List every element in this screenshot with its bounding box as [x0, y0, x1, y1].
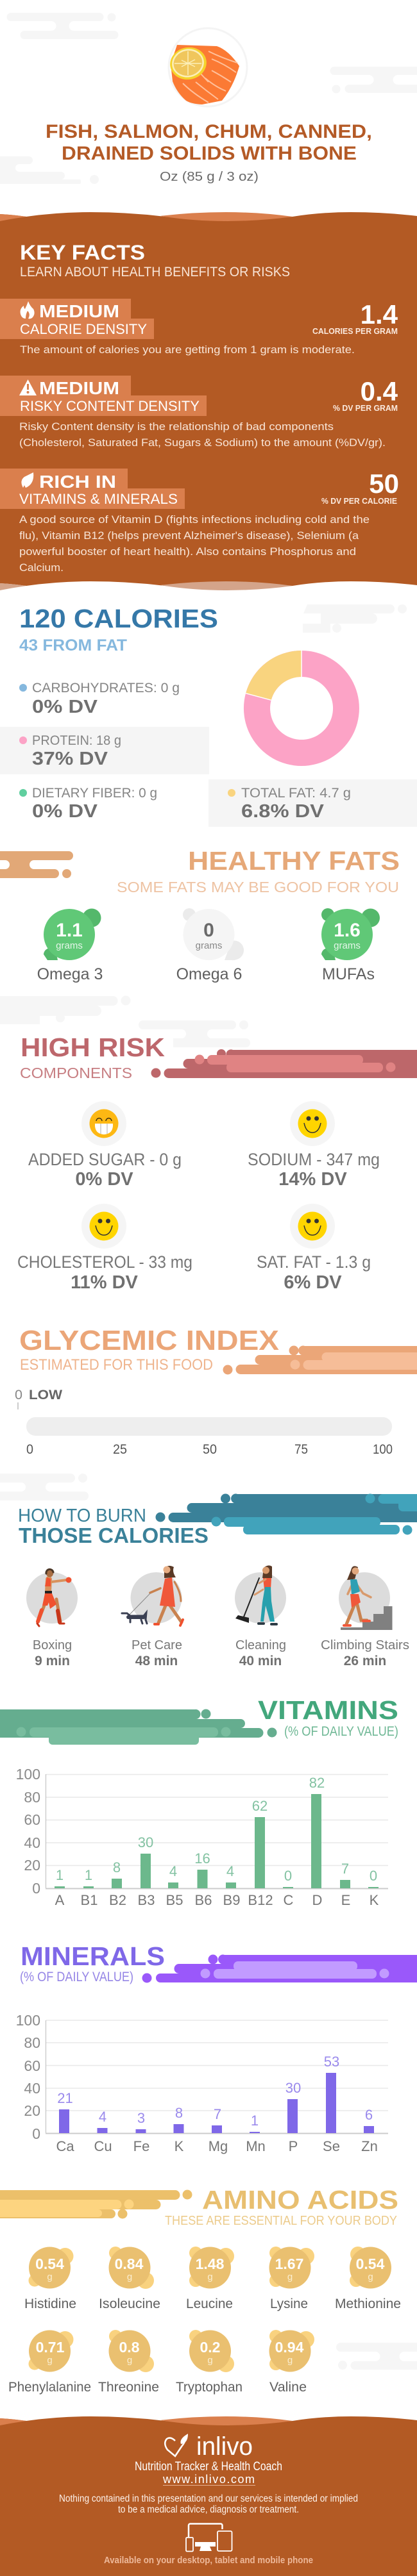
decorative cloud	[0, 2190, 192, 2219]
decorative cloud	[151, 1049, 417, 1078]
icon: smiling face	[298, 1211, 327, 1241]
bar chart: vitamins: B1	[81, 1892, 98, 1908]
legend: protein	[0, 727, 209, 774]
fact: rich in vitamins and minerals: VITAMINS & MINERALS	[19, 491, 178, 507]
bar chart: vitamins: 8	[113, 1859, 121, 1875]
wave bottom	[0, 581, 417, 596]
bar chart: minerals: Ca	[56, 2138, 74, 2154]
bar chart: minerals: 8	[175, 2105, 183, 2121]
activity: pet care	[122, 1566, 183, 1668]
badge: histidine: g	[47, 2272, 53, 2282]
bar chart: vitamins: 4	[169, 1863, 177, 1879]
badge: MUFAs	[321, 908, 380, 983]
bar chart: minerals: 80	[24, 2034, 40, 2051]
fact: calorie density: MEDIUM	[39, 301, 119, 321]
badge: tryptophan: g	[207, 2355, 213, 2366]
bar chart: minerals: Zn	[361, 2138, 378, 2154]
badge: threonine: Threonine	[98, 2380, 159, 2395]
activity: boxing: Boxing	[33, 1638, 72, 1652]
badge: omega 3: Omega 3	[37, 965, 103, 983]
bar chart: vitamins: 40	[24, 1834, 40, 1851]
panel: amino acids	[0, 2185, 401, 2395]
gauge axis: 0	[26, 1442, 33, 1457]
badge: tryptophan: Tryptophan	[176, 2380, 243, 2395]
icon: smiling face	[298, 1109, 327, 1138]
disclaimer: to be a medical advice, diagnosis or treatment.	[118, 2504, 299, 2515]
badge: phenylalanine	[8, 2331, 91, 2395]
bar chart: vitamins: A	[55, 1892, 65, 1908]
bar chart: vitamins: 62	[252, 1798, 268, 1814]
heading: LEARN ABOUT HEALTH BENEFITS OR RISKS	[20, 265, 290, 279]
bar chart: vitamins: B3	[138, 1892, 155, 1908]
activity: cleaning: Cleaning	[235, 1638, 286, 1652]
activity: climbing stairs: Climbing Stairs	[321, 1638, 409, 1652]
badge: histidine: Histidine	[24, 2297, 76, 2311]
panel: key facts	[0, 212, 417, 596]
panel: footer	[0, 2416, 417, 2576]
subheading: (% OF DAILY VALUE)	[284, 1724, 398, 1739]
bar chart: vitamins: 30	[138, 1834, 153, 1850]
bar chart: vitamins: B12	[248, 1892, 273, 1908]
bar chart: minerals: 0	[32, 2125, 40, 2142]
bar chart: minerals: 30	[285, 2080, 301, 2096]
legend: carbohydrates: 0% DV	[32, 697, 98, 717]
bar chart: minerals: 3	[137, 2110, 145, 2126]
badge: isoleucine: 0.84	[115, 2256, 144, 2272]
disclaimer: Nothing contained in this presentation and our services is intended or implied	[59, 2493, 358, 2504]
bar chart: vitamins: 20	[24, 1857, 40, 1874]
fact: calorie density: 1.4	[361, 299, 398, 329]
gauge bar	[26, 1417, 392, 1436]
serving size: Oz (85 g / 3 oz)	[160, 170, 259, 184]
bar chart: vitamins: 80	[24, 1789, 40, 1806]
heading: VITAMINS	[258, 1695, 398, 1725]
legend: total fat: 6.8% DV	[241, 801, 325, 822]
bar chart: minerals: 53	[324, 2054, 339, 2070]
fact: rich in vitamins and minerals: 50	[369, 469, 399, 499]
fact: calorie density	[0, 299, 398, 356]
fact: risky content density: % DV PER GRAM	[333, 403, 398, 413]
badge: omega 6: Omega 6	[176, 965, 242, 983]
bar chart: minerals: 21	[57, 2090, 73, 2106]
icon: warning triangle	[19, 379, 37, 395]
bar chart: minerals	[16, 2012, 388, 2154]
fact: risky content density: 0.4	[361, 376, 398, 406]
badge: phenylalanine: 0.71	[36, 2339, 65, 2356]
bar chart: minerals: 6	[365, 2107, 373, 2123]
badge: histidine: 0.54	[35, 2256, 64, 2272]
badge: MUFAs: grams	[334, 940, 361, 951]
bar chart: minerals: K	[174, 2138, 184, 2154]
image: salmon fillet with lemon slice	[167, 28, 247, 106]
badge: leucine	[186, 2247, 234, 2311]
bar chart: minerals: 100	[16, 2012, 40, 2029]
subheading: ESTIMATED FOR THIS FOOD	[20, 1356, 213, 1374]
bar chart: vitamins: 16	[194, 1850, 210, 1866]
icon: heart with leaf	[165, 2434, 188, 2456]
activity: boxing	[26, 1569, 78, 1668]
bar chart: minerals: Fe	[133, 2138, 149, 2154]
decorative cloud	[223, 1346, 417, 1374]
heading: THOSE CALORIES	[19, 1524, 208, 1547]
bar chart: minerals: Se	[323, 2138, 340, 2154]
gauge value label: 0	[15, 1388, 22, 1402]
decorative cloud	[155, 1493, 417, 1534]
fact: risky content density: RISKY CONTENT DENSITY	[20, 398, 200, 414]
icon: person with broom	[235, 1565, 277, 1624]
bar chart: minerals: Mn	[246, 2138, 266, 2154]
icon: leaf	[21, 472, 33, 488]
badge: lysine	[269, 2247, 314, 2311]
heading: GLYCEMIC INDEX	[19, 1325, 279, 1356]
badge: omega 3	[37, 909, 103, 983]
bar chart: vitamins	[16, 1766, 388, 1908]
panel: how to burn those calories	[18, 1493, 417, 1668]
legend: protein: 37% DV	[32, 749, 108, 769]
item: sodium: SODIUM - 347 mg	[248, 1150, 380, 1169]
wave top	[0, 212, 417, 593]
badge: valine: 0.94	[275, 2339, 304, 2356]
badge: phenylalanine: Phenylalanine	[8, 2380, 91, 2395]
badge: leucine: Leucine	[186, 2297, 233, 2311]
badge: isoleucine: g	[127, 2272, 132, 2282]
badge: valine	[269, 2330, 314, 2395]
legend: total fat: TOTAL FAT: 4.7 g	[241, 786, 351, 801]
badge: MUFAs: MUFAs	[322, 965, 375, 983]
badge: valine: Valine	[269, 2380, 307, 2395]
bar chart: vitamins: B2	[109, 1892, 126, 1908]
activity: climbing stairs: 26 min	[344, 1654, 386, 1668]
legend: dietary fiber: DIETARY FIBER: 0 g	[32, 786, 157, 801]
badge: threonine: g	[127, 2355, 132, 2366]
disclaimer	[59, 2493, 358, 2515]
panel: minerals	[16, 1941, 417, 2154]
badge: tryptophan	[176, 2330, 243, 2395]
badge: methionine	[335, 2247, 401, 2311]
bar chart: vitamins: 82	[309, 1775, 325, 1791]
item: cholesterol: CHOLESTEROL - 33 mg	[17, 1252, 192, 1272]
badge: omega 3: 1.1	[56, 920, 83, 941]
heading: AMINO ACIDS	[202, 2185, 398, 2215]
icon: woman climbing stairs	[341, 1566, 393, 1630]
fact: rich in vitamins and minerals: flu), Vitamin B12 (helps prevent Alzheimer's disease), Selenium (a	[19, 529, 359, 542]
fact: rich in vitamins and minerals: A good source of Vitamin D (fights infections including cold and the	[19, 513, 370, 526]
badge: MUFAs: 1.6	[334, 920, 361, 941]
panel: vitamins	[0, 1695, 398, 1908]
bar chart: vitamins: 0	[370, 1868, 377, 1884]
logo: inlivo	[196, 2432, 253, 2461]
title: DRAINED SOLIDS WITH BONE	[62, 143, 357, 164]
wave	[0, 2416, 417, 2576]
fact: risky content density: (Cholesterol, Saturated Fat, Sugars & Sodium) to the amount (%DV/gr).	[19, 436, 386, 449]
badge: omega 6: 0	[203, 920, 214, 941]
badge: histidine	[24, 2247, 76, 2311]
badge: isoleucine	[99, 2247, 160, 2311]
badge: threonine: 0.8	[119, 2339, 140, 2356]
bar chart: vitamins: 60	[24, 1811, 40, 1828]
subheading: 43 FROM FAT	[19, 636, 127, 654]
fact: risky content density	[0, 376, 398, 449]
badge: threonine	[98, 2330, 159, 2395]
badge: phenylalanine: g	[47, 2355, 53, 2366]
item: added sugar: 0% DV	[75, 1169, 133, 1190]
heading: HIGH RISK	[21, 1033, 165, 1062]
fact: calorie density: The amount of calories you are getting from 1 gram is moderate.	[20, 344, 355, 356]
bar chart: vitamins: 4	[226, 1863, 234, 1879]
bar chart: vitamins: B6	[195, 1892, 212, 1908]
bar chart: vitamins: C	[284, 1892, 294, 1908]
gauge axis: 75	[294, 1442, 308, 1457]
panel: calories	[0, 604, 417, 827]
subheading: SOME FATS MAY BE GOOD FOR YOU	[117, 879, 399, 895]
legend: dietary fiber: 0% DV	[32, 801, 98, 822]
activity: boxing: 9 min	[35, 1654, 70, 1668]
badge: lysine: 1.67	[275, 2256, 303, 2272]
bar chart: minerals: 1	[251, 2113, 259, 2129]
icon: flame	[21, 301, 35, 319]
badge: methionine: Methionine	[335, 2297, 401, 2311]
subheading: THESE ARE ESSENTIAL FOR YOUR BODY	[165, 2214, 397, 2228]
bar chart: vitamins: 7	[341, 1861, 349, 1877]
badge: lysine: Lysine	[270, 2297, 308, 2311]
legend: protein: PROTEIN: 18 g	[32, 733, 121, 748]
bar chart: minerals: Cu	[94, 2138, 112, 2154]
heading	[20, 241, 290, 279]
badge: isoleucine: Isoleucine	[99, 2297, 160, 2311]
fact: risky content density: Risky Content density is the relationship of bad components	[19, 420, 334, 433]
bar chart: minerals: 4	[99, 2109, 106, 2125]
bar chart: vitamins: D	[312, 1892, 322, 1908]
legend: total fat	[208, 779, 417, 827]
item: saturated fat: 6% DV	[284, 1272, 342, 1293]
heading: HEALTHY FATS	[188, 846, 400, 876]
gauge value label	[15, 1388, 62, 1409]
bar chart: vitamins: 1	[85, 1867, 92, 1883]
bar chart: minerals: Mg	[208, 2138, 228, 2154]
item: cholesterol	[17, 1204, 192, 1293]
item: sodium	[248, 1101, 380, 1190]
gauge value label: LOW	[29, 1388, 62, 1402]
bar chart: vitamins: K	[370, 1892, 379, 1908]
heading: KEY FACTS	[20, 241, 145, 264]
badge: lysine: g	[287, 2272, 293, 2282]
panel: healthy fats	[0, 846, 400, 983]
subheading: COMPONENTS	[20, 1065, 132, 1081]
item: cholesterol: 11% DV	[71, 1272, 139, 1293]
decorative cloud	[142, 1955, 417, 1983]
badge: methionine: g	[368, 2272, 373, 2282]
gauge axis	[26, 1442, 393, 1457]
bar chart: minerals: 40	[24, 2080, 40, 2097]
item: sodium: 14% DV	[278, 1169, 347, 1190]
legend: carbohydrates	[19, 681, 180, 717]
icon: smiling face	[90, 1211, 118, 1241]
bar chart: vitamins: 0	[32, 1880, 40, 1897]
activity: pet care: Pet Care	[132, 1638, 182, 1652]
gauge axis: 100	[373, 1442, 393, 1457]
decorative cloud	[0, 1709, 277, 1745]
fact: rich in vitamins and minerals: % DV PER CALORIE	[321, 496, 397, 506]
badge: omega 3: grams	[56, 940, 83, 951]
subheading: (% OF DAILY VALUE)	[20, 1970, 133, 1984]
activity: cleaning: 40 min	[239, 1654, 282, 1668]
decorative cloud	[0, 851, 73, 878]
activity: cleaning	[235, 1565, 286, 1668]
icon: woman walking dog	[122, 1566, 183, 1625]
panel: glycemic index	[15, 1325, 417, 1457]
donut chart	[244, 651, 359, 766]
activity: pet care: 48 min	[135, 1654, 178, 1668]
title	[46, 121, 372, 164]
legend: dietary fiber	[19, 786, 157, 822]
activity: climbing stairs	[321, 1566, 409, 1668]
badge: leucine: 1.48	[196, 2256, 225, 2272]
legend: carbohydrates: CARBOHYDRATES: 0 g	[32, 681, 180, 695]
title: FISH, SALMON, CHUM, CANNED,	[46, 121, 372, 142]
fact: rich in vitamins and minerals: RICH IN	[39, 472, 116, 492]
fact: rich in vitamins and minerals: Calcium.	[19, 561, 64, 574]
website: www.inlivo.com	[162, 2473, 255, 2486]
item: added sugar	[28, 1101, 182, 1190]
badge: tryptophan: 0.2	[200, 2339, 220, 2356]
bar chart: minerals: 20	[24, 2102, 40, 2119]
gauge axis: 25	[113, 1442, 127, 1457]
panel: high risk components	[17, 1033, 417, 1293]
fact: calorie density: CALORIE DENSITY	[20, 321, 147, 337]
badge: omega 6: grams	[196, 940, 222, 951]
icon: grinning face	[90, 1109, 118, 1138]
badge: methionine: 0.54	[356, 2256, 385, 2272]
badge: omega 6	[176, 908, 244, 983]
badge: valine: g	[287, 2355, 293, 2366]
item: added sugar: ADDED SUGAR - 0 g	[28, 1150, 182, 1169]
bar chart: vitamins: B5	[166, 1892, 183, 1908]
gauge axis: 50	[203, 1442, 217, 1457]
fact: risky content density: MEDIUM	[39, 378, 119, 398]
bar chart: vitamins: B9	[223, 1892, 240, 1908]
tagline: Nutrition Tracker & Health Coach	[135, 2460, 282, 2473]
bar chart: minerals: P	[289, 2138, 298, 2154]
badge: leucine: g	[207, 2272, 213, 2282]
availability note: Available on your desktop, tablet and mobile phone	[104, 2555, 313, 2566]
heading: HOW TO BURN	[18, 1506, 146, 1526]
bar chart: minerals: 7	[214, 2106, 221, 2122]
heading	[18, 1506, 208, 1547]
heading: 120 CALORIES	[19, 604, 218, 633]
fact: rich in vitamins and minerals: powerful booster of heart health). Also contains Phosphorus and	[19, 545, 356, 558]
icon: devices	[186, 2524, 232, 2551]
icon: boxer	[37, 1569, 72, 1626]
item: saturated fat: SAT. FAT - 1.3 g	[257, 1252, 371, 1272]
item: saturated fat	[257, 1204, 371, 1293]
bar chart: minerals: 60	[24, 2057, 40, 2074]
bar chart: vitamins: 1	[56, 1867, 64, 1883]
bar chart: vitamins: 0	[284, 1868, 292, 1884]
fact: rich in vitamins and minerals	[0, 469, 399, 574]
fact: calorie density: CALORIES PER GRAM	[312, 326, 398, 336]
logo	[165, 2432, 253, 2461]
bar chart: vitamins: E	[341, 1892, 350, 1908]
bar chart: vitamins: 100	[16, 1766, 40, 1782]
heading: MINERALS	[21, 1941, 165, 1971]
